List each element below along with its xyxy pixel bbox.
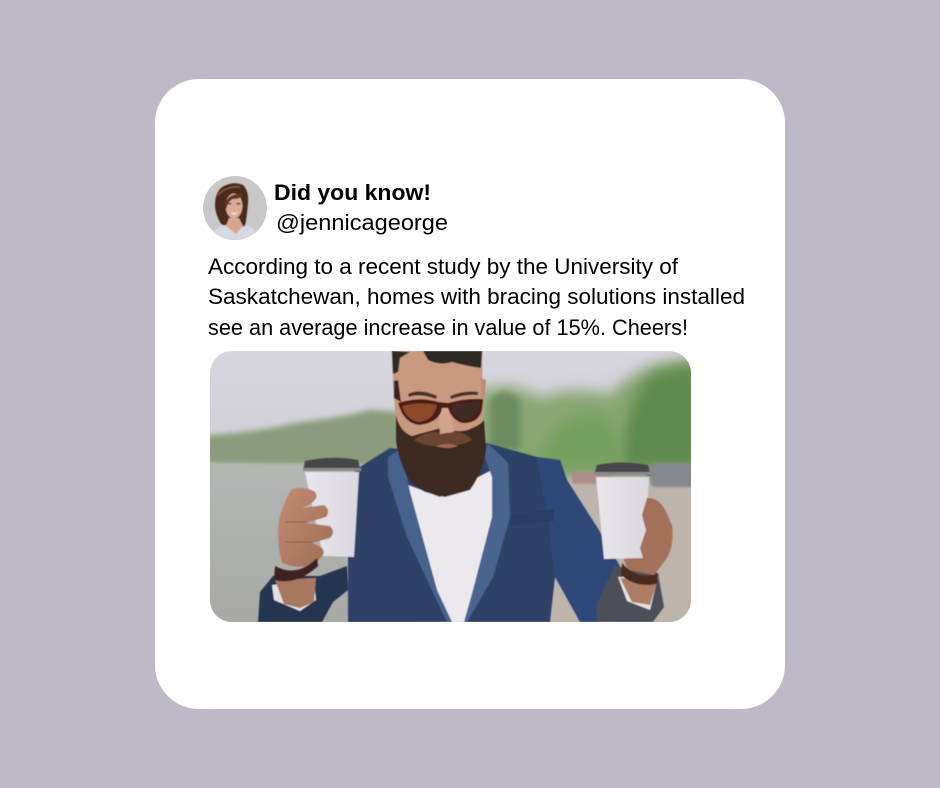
moustache — [414, 432, 472, 446]
text block: study statement: Saskatchewan, homes with bracing solutions installed — [208, 284, 745, 309]
right watch strap — [621, 563, 658, 585]
left hand and fingers — [278, 488, 333, 567]
panel: white card — [155, 79, 785, 709]
chest pocket — [546, 509, 554, 522]
handle: @jennicageorge: @jennicageorge — [276, 210, 448, 235]
right grey cuff — [597, 566, 664, 622]
left coffee cup — [303, 458, 361, 557]
right lapel — [464, 443, 510, 622]
text block: study statement: According to a recent study by the University of — [208, 254, 679, 279]
mouth — [436, 444, 458, 448]
ear — [481, 378, 486, 400]
right fingers — [640, 498, 673, 559]
right sleeve — [537, 457, 620, 622]
white t-shirt — [408, 470, 492, 622]
right hand behind cup — [624, 498, 672, 575]
icon: avatar portrait — [203, 176, 267, 240]
sunglasses — [394, 380, 483, 425]
right coffee cup — [594, 462, 651, 559]
man — [258, 351, 672, 622]
hair — [392, 351, 410, 374]
jacket body — [348, 443, 567, 622]
right shirt cuff — [618, 577, 658, 610]
right forearm — [620, 578, 657, 605]
left sleeve — [258, 566, 348, 622]
infographic scene — [155, 79, 785, 709]
left forearm — [275, 578, 316, 608]
beard — [396, 415, 486, 497]
photo background: sky, trees, water — [200, 351, 700, 629]
text block: study statement — [208, 254, 745, 340]
text block: study statement: see an average increase in value of 15%. Cheers! — [208, 315, 688, 340]
nose — [438, 408, 454, 434]
brow — [408, 391, 437, 399]
head — [392, 351, 484, 436]
photo: bearded man holding two coffee cups — [200, 351, 700, 629]
left shirt cuff — [272, 580, 316, 611]
left lapel — [388, 449, 452, 622]
left watch strap — [274, 558, 318, 581]
heading: Did you know!: Did you know! — [274, 180, 431, 205]
